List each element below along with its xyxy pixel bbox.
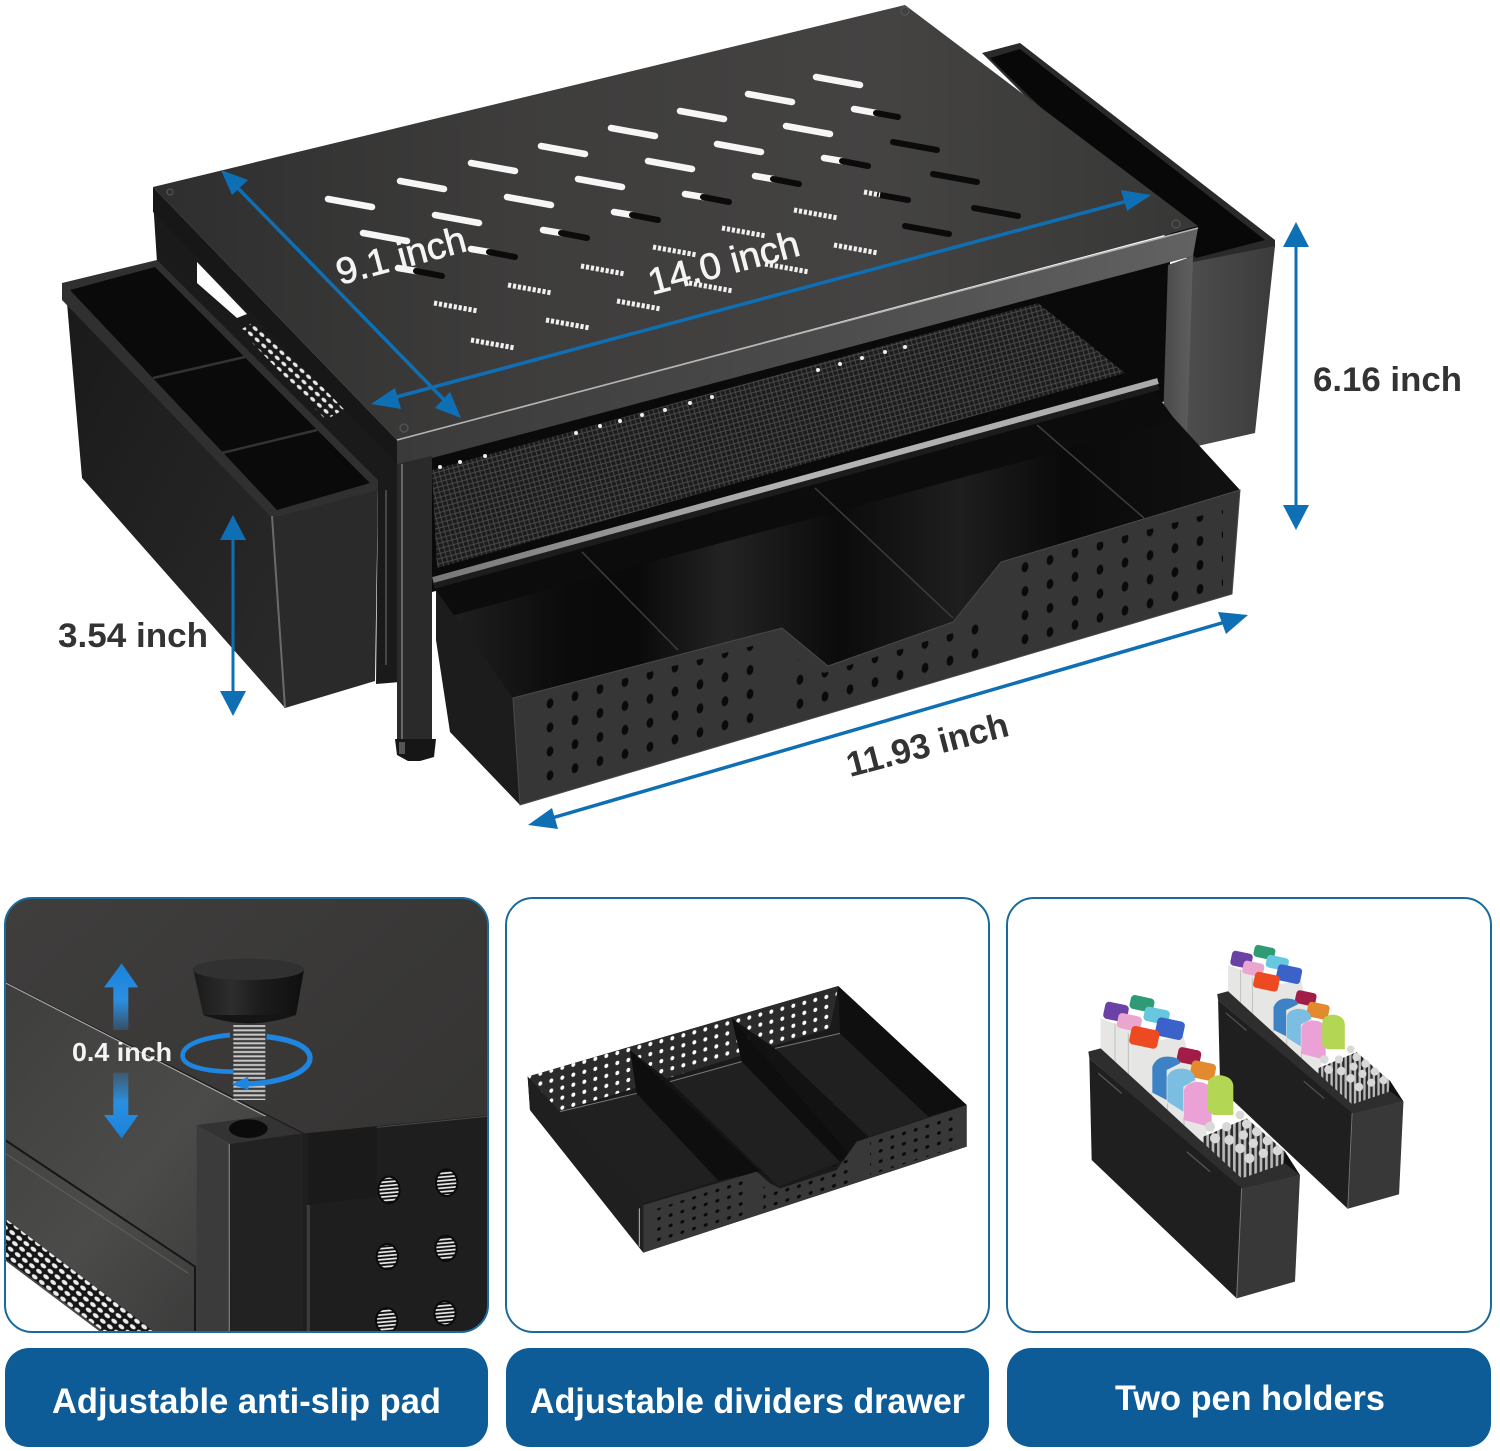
open shelf area with mesh [432, 262, 1170, 592]
caption bar: two pen holders [1007, 1348, 1491, 1447]
right leg [1163, 256, 1193, 440]
right face [305, 1115, 490, 1340]
perforated front wall [643, 1105, 967, 1253]
dimension label: 3.54 inch: 3.54 inch [58, 617, 208, 655]
ventilation slots [328, 77, 1018, 348]
main product: monitor stand with drawers [58, 5, 1462, 829]
right pen holder [982, 43, 1275, 450]
down arrow [104, 1073, 138, 1138]
panel background surface [6, 899, 487, 1134]
up arrow [104, 963, 138, 1030]
panel: adjustable anti-slip pad [0, 890, 500, 1340]
dimension label: 6.16 inch: 6.16 inch [1313, 361, 1462, 399]
side face [0, 983, 302, 1340]
tray base [528, 986, 967, 1253]
blue rotation ring [183, 1035, 310, 1090]
perforation holes [376, 1169, 457, 1333]
label: 0.4 inch: 0.4 inch [72, 1037, 172, 1067]
dimension label: 11.93 inch: 11.93 inch [842, 705, 1013, 785]
rear pen holder with markers [1217, 944, 1403, 1209]
caption bar: adjustable anti-slip pad [5, 1348, 488, 1447]
corner post [197, 1116, 302, 1144]
stand top plate [153, 5, 1198, 470]
panel: adjustable dividers drawer [506, 898, 989, 1332]
dimension arrow: 11.93 inch drawer length [528, 612, 1248, 829]
dimension arrow: 6.16 inch height [1283, 222, 1309, 530]
perforated back wall [528, 986, 838, 1112]
caption bar: adjustable dividers drawer: Adjustable dividers drawer [530, 1382, 965, 1421]
mesh strip [5, 1218, 158, 1335]
dimension arrow: 14.0 inch width [371, 190, 1151, 409]
left leg and foot [395, 456, 436, 761]
caption bar: adjustable anti-slip pad: Adjustable anti-slip pad [52, 1382, 441, 1421]
corner bolts [167, 7, 1180, 432]
dimension label: 14.0 inch: 14.0 inch [643, 223, 804, 303]
dimension arrow: 3.54 inch height [220, 515, 246, 716]
dimension arrow: 9.1 inch depth [221, 170, 461, 418]
rubber foot and screw [233, 1025, 265, 1100]
caption bar: two pen holders: Two pen holders [1115, 1379, 1385, 1418]
perforated front wall [513, 490, 1240, 805]
divider tray illustration [528, 986, 967, 1253]
dimension label: 9.1 inch: 9.1 inch [331, 219, 471, 293]
chrome rail [433, 381, 1158, 583]
panel: two pen holders [1007, 898, 1491, 1332]
compartment floors [560, 987, 967, 1203]
left wall [528, 1077, 643, 1253]
stand side with handle slot and mesh [153, 200, 400, 684]
left pen holder [62, 260, 378, 708]
front pen holder with markers [1088, 994, 1300, 1298]
caption bar: adjustable dividers drawer [506, 1348, 989, 1447]
front drawer with dividers [436, 385, 1240, 805]
